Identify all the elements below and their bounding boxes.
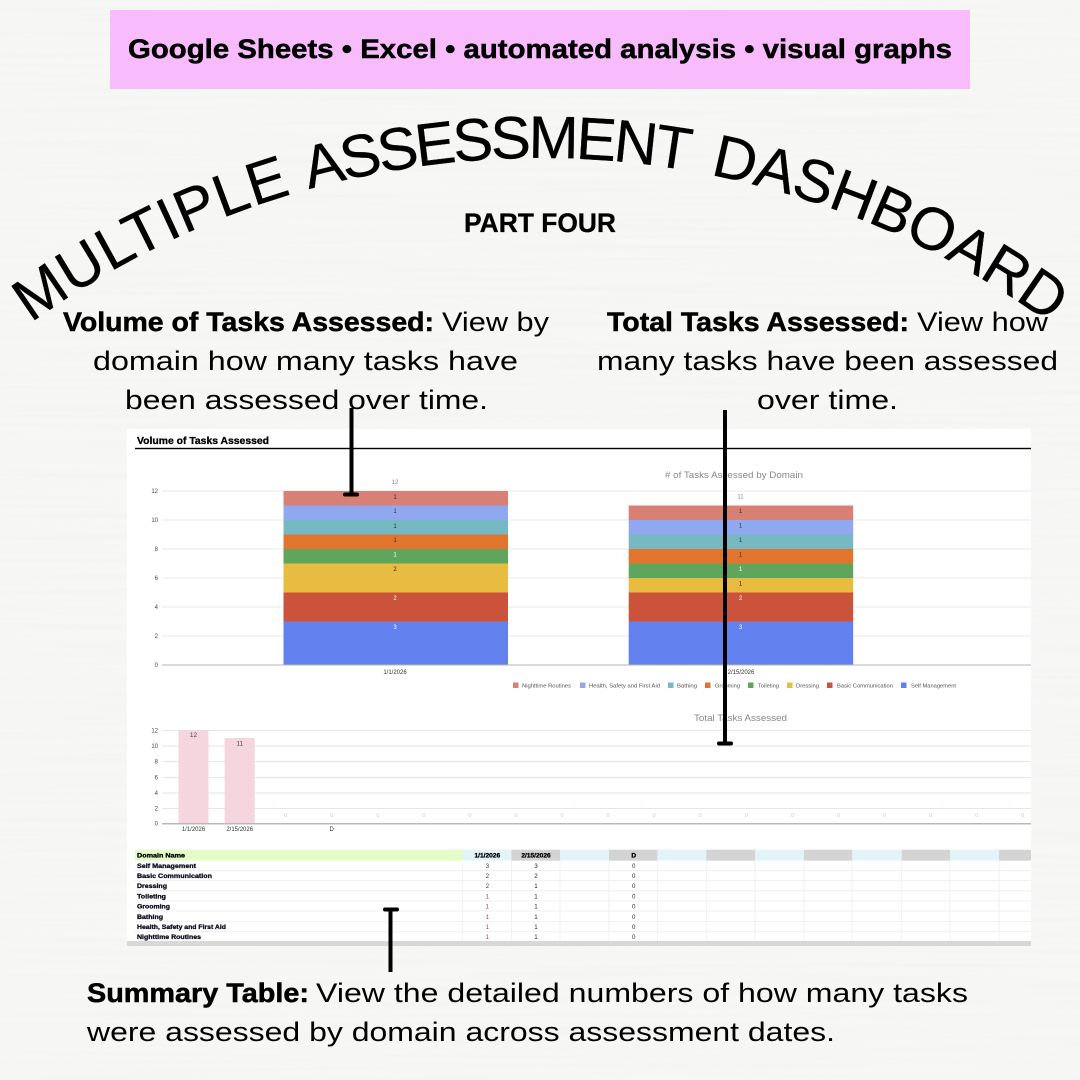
text block: volume of tasks assessed: been assessed over time. [125, 385, 488, 415]
text block: total tasks assessed: View how [917, 307, 1049, 337]
x axis labels: 2/15/2026 [226, 827, 254, 833]
column values: 1/1/2026 [486, 863, 490, 941]
panel heading: volume of tasks assessed: Volume of Tasks Assessed [137, 436, 269, 447]
x axis labels [182, 827, 335, 833]
zero value labels: 0 [330, 813, 333, 819]
zero value labels: 0 [1021, 813, 1024, 819]
column values: D: 0 [632, 873, 636, 880]
bar: 2/15/2026: 1 [739, 552, 743, 558]
bars: totals by date [178, 730, 255, 824]
y axis labels: 4 [155, 791, 159, 797]
text block: total tasks assessed: many tasks have been assessed [597, 346, 1058, 376]
table header row: 1/1/2026 [474, 852, 500, 860]
table header row: D [631, 852, 636, 860]
legend: Basic Communication [837, 684, 893, 690]
column values: 1/1/2026: 1 [486, 914, 490, 921]
bar: 1/1/2026: 3 [393, 625, 397, 631]
text block: total tasks assessed: Total Tasks Assessed: [607, 307, 909, 337]
domain names: Dressing [137, 883, 167, 890]
zero value labels: 0 [606, 813, 610, 819]
zero value labels: 0 [422, 813, 425, 819]
domain names: Nighttime Routines [137, 934, 201, 941]
x axis labels: 1/1/2026 [182, 827, 206, 833]
text block: summary table: were assessed by domain across assessment dates. [86, 1017, 835, 1047]
bar: 1/1/2026: 1 [393, 538, 397, 544]
zero value labels: 0 [883, 813, 886, 819]
legend: Dressing [796, 684, 819, 690]
legend: Self Management [911, 684, 956, 690]
column values: 1/1/2026: 1 [486, 894, 490, 900]
dashboard screenshot panel [127, 429, 1031, 946]
zero value labels: 0 [514, 813, 518, 819]
y axis labels: 8 [155, 547, 159, 553]
y axis labels [151, 728, 159, 828]
bar: 1/1/2026: 12 [392, 480, 399, 486]
y axis labels: 6 [155, 576, 159, 582]
zero value labels: 0 [699, 813, 702, 819]
column values: D: 0 [632, 914, 636, 921]
y axis labels: 2 [155, 806, 159, 812]
zero value labels: 0 [975, 813, 978, 819]
bar: 1/1/2026: 1 [393, 524, 397, 530]
column values: D: 0 [632, 894, 636, 900]
bar: 1/1/2026: 1 [393, 552, 397, 558]
column values: 1/1/2026: 2 [486, 873, 490, 880]
chart title: total tasks: Total Tasks Assessed [694, 713, 787, 724]
bar: 2/15/2026: 11 [737, 494, 744, 500]
y axis labels: 2 [155, 634, 159, 640]
column values: 2/15/2026: 1 [534, 924, 538, 931]
bar: 2/15/2026: 1 [739, 509, 743, 515]
y axis labels: 6 [155, 776, 159, 782]
text block: summary table: Summary Table: [87, 978, 309, 1008]
bar: 1/1/2026: 1 [393, 495, 397, 501]
y axis labels: 10 [151, 518, 159, 524]
column values: 1/1/2026: 1 [486, 934, 490, 941]
zero value labels: 0 [468, 813, 471, 819]
bar: 1/1/2026: 2 [393, 567, 397, 573]
bars: totals by date: 12 [190, 732, 197, 739]
zero value labels: 0 [560, 813, 564, 819]
text block: volume of tasks assessed [63, 307, 550, 415]
legend: Grooming [715, 684, 740, 690]
title: curved heading: MULTIPLE ASSESSMENT DASHBOARD [11, 116, 1064, 320]
column values: D: 0 [632, 883, 636, 890]
column values: 1/1/2026: 1 [486, 904, 490, 910]
bar: 2/15/2026 [629, 494, 853, 665]
bar: 2/15/2026: 3 [739, 625, 743, 631]
zero value labels: 0 [284, 813, 287, 819]
column values: 2/15/2026 [534, 863, 538, 941]
column values: 2/15/2026: 1 [534, 883, 538, 890]
bar: 2/15/2026: 1 [739, 567, 743, 573]
domain names: Self Management [137, 863, 197, 870]
x axis labels [383, 670, 755, 676]
summary table [127, 850, 1031, 946]
y axis labels: 8 [155, 760, 159, 766]
bar: 2/15/2026: 2 [739, 596, 743, 602]
stacked bar chart: tasks assessed by domain [151, 470, 1031, 690]
column values: D [632, 863, 636, 941]
y axis labels: 10 [151, 744, 159, 750]
y axis labels: 12 [151, 728, 159, 734]
zero value labels: 0 [745, 813, 748, 819]
table header row [135, 850, 1031, 861]
zero value labels: 0 [376, 813, 379, 819]
column values: D: 0 [632, 863, 636, 870]
domain names: Health, Safety and First Aid [137, 924, 226, 931]
column chart: total tasks assessed [151, 713, 1031, 833]
zero value labels: 0 [837, 813, 840, 819]
bar: 1/1/2026 [284, 480, 508, 665]
bar: 1/1/2026: 1 [393, 509, 397, 515]
banner: supported tools: Google Sheets • Excel • automated analysis • visual graphs [128, 34, 952, 64]
zero value labels [284, 813, 1024, 819]
column values: 2/15/2026: 1 [534, 894, 538, 900]
table header row: 2/15/2026 [521, 852, 551, 860]
column values: D: 0 [632, 904, 636, 910]
domain names: Basic Communication [137, 873, 212, 880]
text block: total tasks assessed [597, 307, 1058, 415]
y axis labels: 4 [155, 605, 159, 611]
chart title: tasks by domain: # of Tasks Assessed by Domain [665, 470, 803, 481]
column values: 1/1/2026: 2 [486, 883, 490, 890]
zero value labels: 0 [791, 813, 794, 819]
bar: 2/15/2026: 1 [739, 582, 743, 588]
domain names: Bathing [137, 914, 163, 921]
arrow: total tasks connector [717, 410, 733, 746]
column values: 2/15/2026: 3 [534, 863, 538, 870]
y axis labels [151, 489, 159, 669]
text block: volume of tasks assessed: Volume of Tasks Assessed: [63, 307, 434, 337]
text block: total tasks assessed: over time. [757, 385, 898, 415]
column values: D: 0 [632, 924, 636, 931]
column values: D: 0 [632, 934, 636, 941]
subtitle: part four: PART FOUR [464, 208, 616, 238]
domain names: Toileting [137, 894, 166, 900]
bar: 2/15/2026: 1 [739, 524, 743, 530]
legend [513, 682, 956, 690]
legend: Nighttime Routines [522, 684, 571, 690]
column values: 2/15/2026: 1 [534, 914, 538, 921]
zero value labels: 0 [929, 813, 932, 819]
legend: Bathing [677, 684, 697, 690]
x axis labels: 1/1/2026 [383, 670, 407, 676]
text block: summary table: View the detailed numbers of how many tasks [316, 978, 968, 1008]
table header row: Domain Name [137, 852, 185, 860]
column values: 2/15/2026: 1 [534, 904, 538, 910]
domain names: Grooming [137, 904, 170, 910]
bars: totals by date: 11 [236, 740, 243, 748]
text block: volume of tasks assessed: domain how many tasks have [93, 346, 518, 376]
legend: Health, Safety and First Aid [589, 684, 660, 690]
legend: Toileting [758, 684, 779, 690]
x axis labels: D [330, 827, 335, 833]
column values: 1/1/2026: 1 [486, 924, 490, 931]
text block: volume of tasks assessed: View by [442, 307, 550, 337]
domain names [137, 863, 226, 941]
x axis labels: 2/15/2026 [728, 670, 755, 676]
column values: 2/15/2026: 1 [534, 934, 538, 941]
column values: 2/15/2026: 2 [534, 873, 538, 880]
text block: summary table [86, 978, 968, 1047]
y axis labels: 12 [151, 489, 159, 495]
arrow: volume of tasks connector [343, 408, 359, 496]
arrow: summary table connector [383, 908, 399, 972]
column values: 1/1/2026: 3 [486, 863, 490, 870]
bar: 1/1/2026: 2 [393, 596, 397, 602]
zero value labels: 0 [653, 813, 656, 819]
y axis labels: 0 [155, 663, 159, 669]
y axis labels: 0 [155, 822, 159, 828]
bar: 2/15/2026: 1 [739, 538, 743, 544]
banner: supported tools [110, 10, 970, 89]
